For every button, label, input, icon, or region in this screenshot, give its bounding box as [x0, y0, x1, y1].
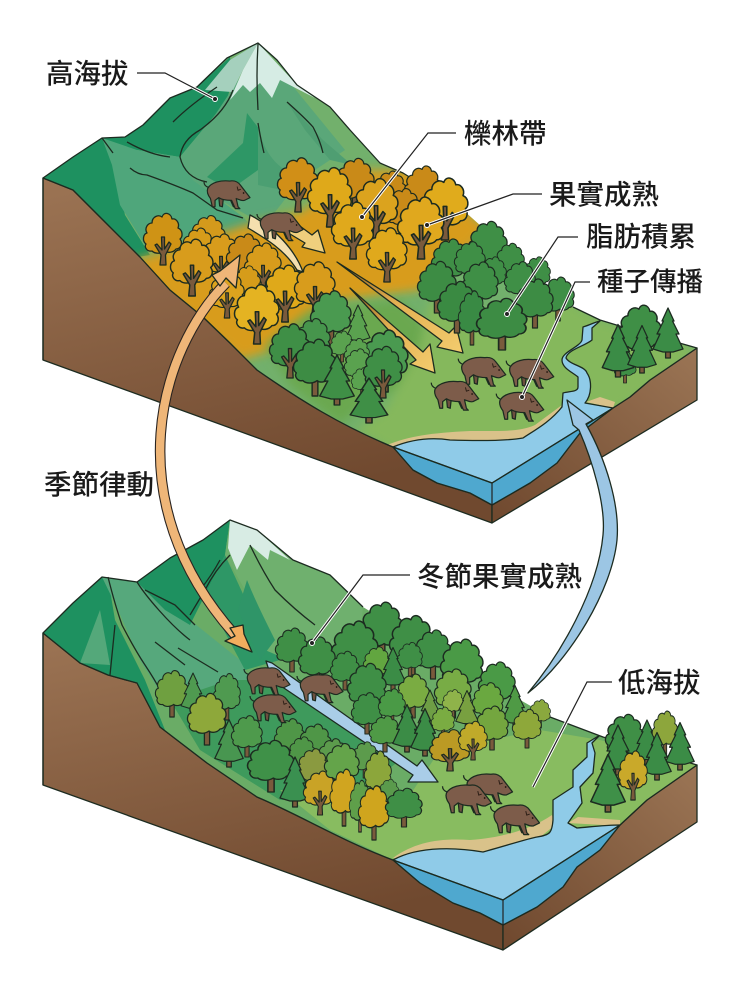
label: 果實成熟: 果實成熟 — [549, 179, 659, 210]
terrain: surface outline — [43, 43, 697, 483]
terrain: left soil face — [43, 178, 492, 523]
trees: right corner mixed forest — [591, 711, 694, 812]
terrain: surface outline — [43, 520, 697, 900]
terrain: water cross-section — [393, 408, 613, 505]
terrain: right soil face — [503, 765, 697, 950]
terrain: water cross-section — [393, 825, 620, 925]
panel: low-altitude landscape block — [40, 500, 700, 950]
arrow: orange seasonal arc — [160, 255, 252, 652]
trees: autumn oak upper cluster — [277, 158, 468, 282]
label: 果實成熟 — [424, 179, 659, 228]
terrain: left soil face — [43, 633, 503, 950]
label: 低海拔 — [533, 667, 700, 787]
boars: forest and meadow groups — [244, 668, 540, 835]
water surface and river — [393, 321, 613, 483]
label: 高海拔: 高海拔 — [46, 58, 128, 89]
label: 脂肪積累 — [504, 221, 696, 316]
boars: foraging on meadow — [431, 357, 554, 421]
label: 季節律動: 季節律動 — [44, 469, 154, 500]
label: 櫟林帶: 櫟林帶 — [464, 118, 546, 149]
terrain: top surface — [40, 40, 700, 490]
label: 櫟林帶 — [360, 118, 546, 220]
yellow arrows: migration downslope — [248, 215, 463, 373]
label: 脂肪積累: 脂肪積累 — [586, 221, 696, 252]
arrow: blue seasonal arc — [528, 400, 617, 693]
trees: right corner forest — [602, 305, 683, 383]
trees: green forest right — [417, 221, 574, 350]
mountain ridge lines — [108, 545, 315, 690]
water surface and river — [393, 735, 620, 900]
panel: autumn high-altitude landscape block — [40, 40, 700, 523]
mountain ridge lines — [102, 44, 323, 218]
label: 高海拔 — [46, 58, 218, 102]
label: 冬節果實成熟: 冬節果實成熟 — [417, 561, 582, 592]
terrain: right soil face — [492, 348, 697, 523]
terrain: top surface — [44, 520, 696, 900]
trees: lower-left mixed woodland — [155, 671, 422, 840]
blue arrow: migration downslope — [266, 661, 438, 782]
label: 低海拔: 低海拔 — [618, 667, 700, 698]
label: 種子傳播: 種子傳播 — [597, 267, 703, 297]
trees: green forest centre — [269, 291, 408, 423]
label: 種子傳播 — [520, 267, 703, 400]
trees: mid-slope forest — [275, 602, 550, 771]
trees: autumn oak left cluster — [143, 213, 335, 344]
label: 冬節果實成熟 — [310, 561, 582, 646]
boars: on mountain slope — [204, 181, 303, 241]
